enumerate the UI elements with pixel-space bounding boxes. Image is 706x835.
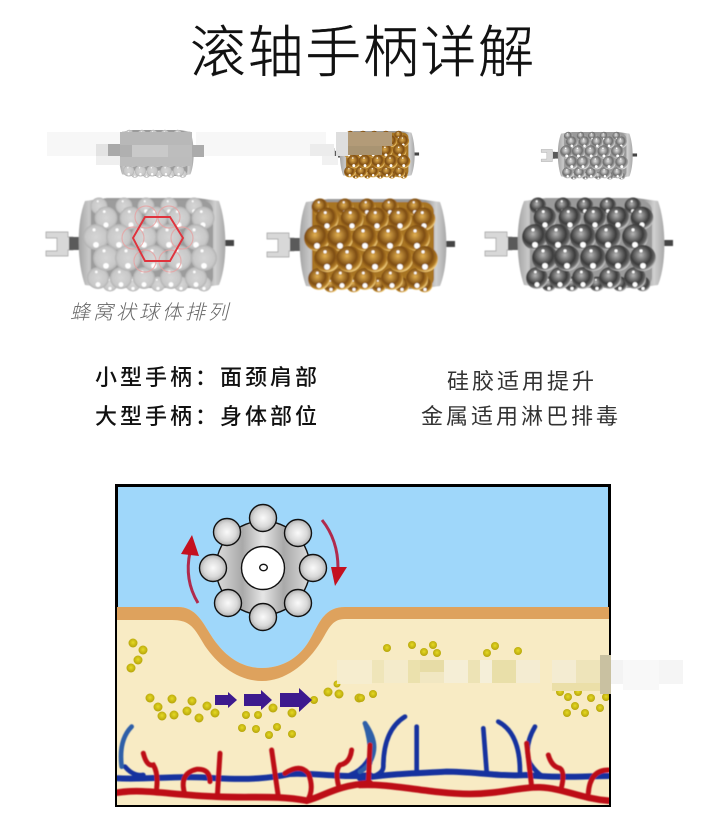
text: handle sizes <box>95 365 320 429</box>
title: 滚轴手柄详解 <box>190 21 536 84</box>
honeycomb hexagon highlight <box>122 206 193 272</box>
pixelated watermark over small rollers <box>47 132 392 166</box>
small roller: silver metal <box>541 132 637 180</box>
blood and lymph vessels <box>117 717 608 802</box>
pixelated watermark over panel <box>337 655 683 694</box>
text: handle sizes: 小型手柄：面颈肩部 <box>95 365 320 390</box>
small roller: frosted silicone <box>102 130 198 178</box>
text: material uses: 金属适用淋巴排毒 <box>421 404 621 429</box>
text: handle sizes: 大型手柄：身体部位 <box>95 404 320 429</box>
panel: skin massage diagram <box>116 486 610 806</box>
caption: honeycomb arrangement: 蜂窝状球体排列 <box>70 302 231 324</box>
text: material uses: 硅胶适用提升 <box>447 369 597 394</box>
large roller: gold metal <box>267 198 455 292</box>
large roller: silver metal <box>485 198 673 292</box>
large roller: frosted silicone <box>46 198 234 292</box>
fat particles <box>126 638 610 739</box>
push arrows <box>215 688 312 712</box>
rotation arrow: right <box>322 520 347 586</box>
text: material uses <box>421 369 621 429</box>
rotation arrow: left <box>181 535 199 603</box>
small roller: gold metal <box>323 131 419 179</box>
roller cross-section <box>200 504 326 630</box>
skin layers <box>117 607 609 805</box>
